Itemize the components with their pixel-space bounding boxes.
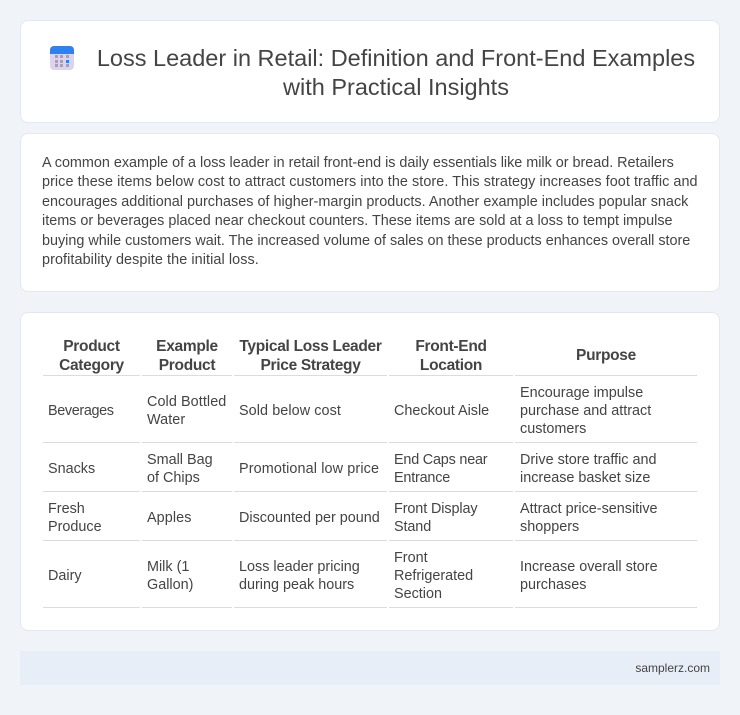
table: loss leader examples: Encourage impulse (520, 385, 643, 401)
table: loss leader examples (43, 338, 697, 608)
text block: description: items or beverages placed near checkout counters. These items are sold at a loss to tempt impulse (42, 213, 673, 229)
table: loss leader examples: shoppers (520, 519, 579, 535)
panel: description card (20, 133, 720, 292)
header: Front-End Location (415, 338, 487, 374)
footer bar (20, 651, 720, 685)
title (97, 45, 695, 100)
table: loss leader examples: Discounted per pound (239, 510, 380, 526)
row: Fresh Produce (48, 501, 102, 535)
header: Product Category (59, 338, 124, 374)
text block: description: encourages additional purchases of higher-margin products. Another example includes popular snack (42, 194, 688, 210)
header: Purpose: Purpose (576, 347, 636, 364)
table: loss leader examples: Increase overall store (520, 559, 658, 575)
row: Snacks: Snacks (48, 461, 95, 477)
text block: description: profitability despite the initial loss. (42, 252, 259, 268)
table: loss leader examples: Cold Bottled (147, 394, 226, 410)
header: Front-End Location: Location (420, 357, 482, 374)
text block: description: buying while customers wait. The increased volume of sales on these products enhances overall store (42, 233, 690, 249)
footer text: samplerz.com (635, 661, 710, 675)
table: loss leader examples: Refrigerated (394, 568, 473, 584)
table: loss leader examples: of Chips (147, 470, 200, 486)
table: loss leader examples: Water (147, 412, 185, 428)
table: loss leader examples: purchase and attract (520, 403, 651, 419)
table: loss leader examples: Front (394, 550, 428, 566)
icon: calendar (50, 46, 74, 70)
text block: description: A common example of a loss leader in retail front-end is daily essentials like milk or bread. Retailers (42, 155, 674, 171)
table: loss leader examples: Attract price-sensitive (520, 501, 658, 517)
header: Price Strategy: Price Strategy (260, 357, 361, 374)
table: loss leader examples: Drive store traffic and (520, 452, 657, 468)
table: loss leader examples: Entrance (394, 470, 450, 486)
table: loss leader examples: Milk (1 (147, 559, 189, 575)
table: loss leader examples: Small Bag (147, 452, 213, 468)
table: loss leader examples: Checkout Aisle (394, 403, 489, 419)
header: Front-End Location: Front-End (415, 338, 487, 355)
table: loss leader examples: Apples (147, 510, 191, 526)
text block: description (42, 155, 698, 268)
table: loss leader examples: Promotional low price (239, 461, 379, 477)
row: Fresh Produce: Produce (48, 519, 102, 535)
table: loss leader examples: during peak hours (239, 577, 354, 593)
table: loss leader examples: Loss leader pricing (239, 559, 360, 575)
header: Example Product (156, 338, 218, 374)
table: loss leader examples: increase basket size (520, 470, 650, 486)
table: loss leader examples: Front Display (394, 501, 477, 517)
title: with Practical Insights (283, 74, 509, 100)
row: Beverages: Beverages (48, 403, 114, 419)
header: Product Category: Product (63, 338, 120, 355)
text block: description: price these items below cost to attract customers into the store. This strategy increases foot traffic and (42, 174, 698, 190)
row: Dairy: Dairy (48, 568, 82, 584)
table: loss leader examples: Gallon) (147, 577, 193, 593)
table: loss leader examples: Section (394, 586, 442, 602)
panel: table card (20, 312, 720, 631)
header: Product Category: Category (59, 357, 124, 374)
header: Example Product: Product (159, 357, 215, 374)
header: Price Strategy: Typical Loss Leader (239, 338, 382, 355)
table: loss leader examples: customers (520, 421, 586, 437)
title: Loss Leader in Retail: Definition and Front-End Examples (97, 45, 695, 71)
row: Fresh Produce: Fresh (48, 501, 85, 517)
table: loss leader examples: Sold below cost (239, 403, 341, 419)
header: Example Product: Example (156, 338, 218, 355)
panel: title card (20, 20, 720, 123)
table: loss leader examples: End Caps near (394, 452, 487, 468)
header: Price Strategy (239, 338, 382, 374)
table: loss leader examples: Stand (394, 519, 431, 535)
table: loss leader examples: purchases (520, 577, 586, 593)
